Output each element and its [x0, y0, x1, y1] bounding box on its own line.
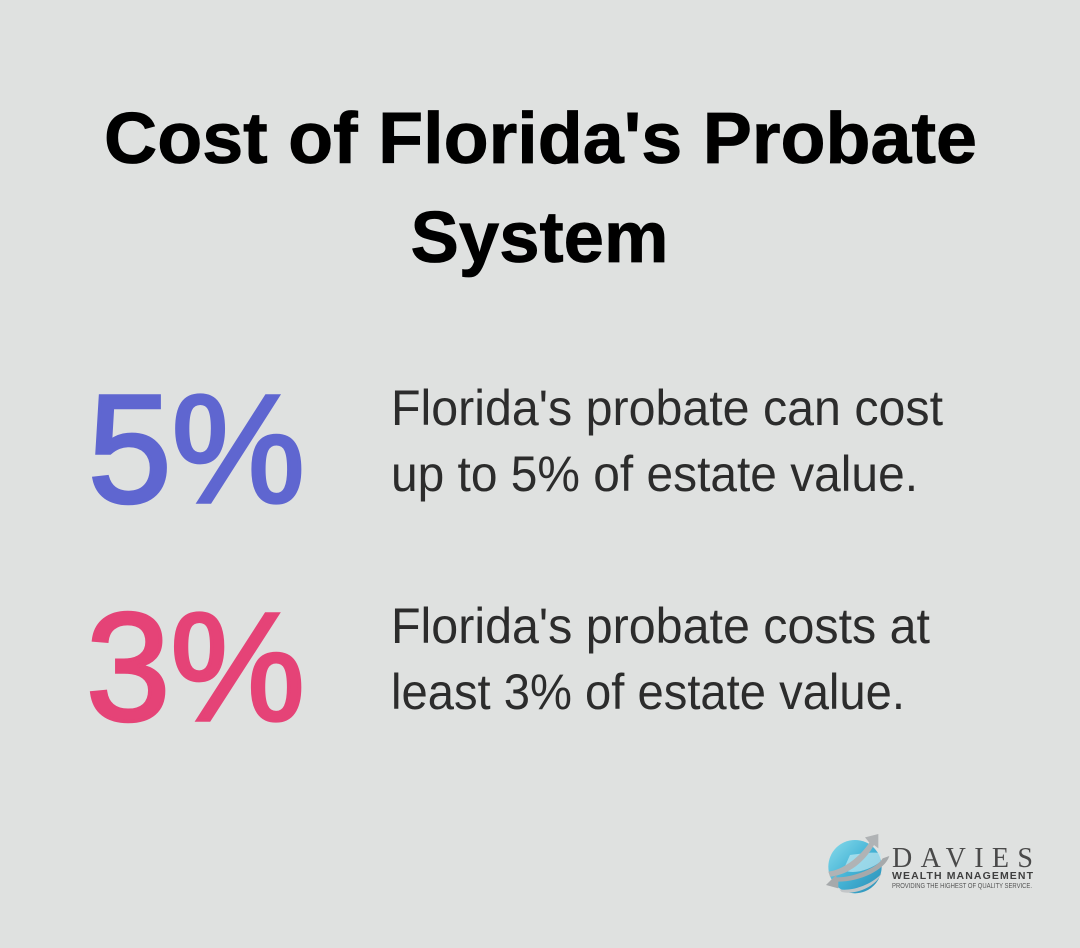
stat row: 3%	[86, 581, 930, 753]
title	[104, 99, 977, 278]
stat value: 5%: 5%	[88, 363, 305, 535]
stat value: 3%: 3%	[86, 581, 305, 753]
logo wordmark: DAVIES	[892, 843, 1033, 874]
icon: globe with arrows	[826, 834, 889, 893]
logo: Davies Wealth Management	[826, 834, 1034, 893]
stat row: 5%	[88, 363, 943, 535]
stat description: 5%: Florida's probate can cost	[391, 380, 943, 436]
stat description: 5%	[391, 380, 943, 502]
stat description: 5%: up to 5% of estate value.	[391, 446, 918, 502]
logo subtitle: WEALTH MANAGEMENT	[892, 870, 1034, 882]
stat description: 3%: Florida's probate costs at	[391, 598, 930, 654]
logo tagline: PROVIDING THE HIGHEST OF QUALITY SERVICE.	[892, 883, 1032, 890]
title: System	[410, 198, 668, 278]
title: Cost of Florida's Probate	[104, 99, 977, 179]
stat description: 3%: least 3% of estate value.	[391, 664, 905, 720]
stat description: 3%	[391, 598, 930, 720]
